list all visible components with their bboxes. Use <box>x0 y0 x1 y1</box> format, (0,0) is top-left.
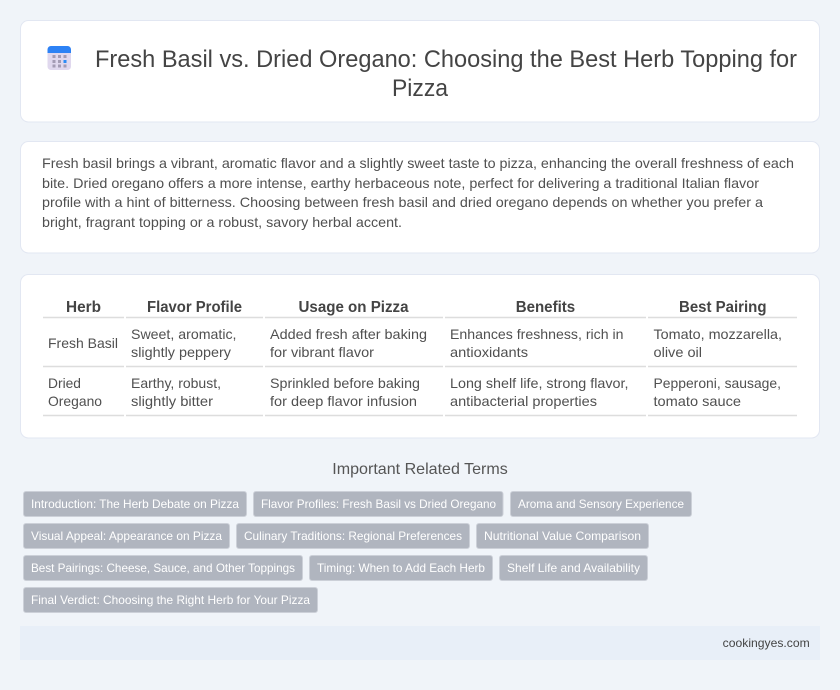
panel: comparison table <box>20 274 820 438</box>
tag: Culinary Traditions: Regional Preferences <box>244 529 462 543</box>
tag: Introduction: The Herb Debate on Pizza <box>31 497 239 511</box>
tag: Final Verdict: Choosing the Right Herb for Your Pizza <box>31 593 310 607</box>
footer: cookingyes.com <box>723 636 810 650</box>
tag <box>236 524 470 548</box>
table header: Benefits <box>516 299 575 316</box>
intro paragraph <box>42 155 794 230</box>
table row: dried oregano: tomato sauce <box>654 393 741 409</box>
title text <box>95 46 797 102</box>
tag: Visual Appeal: Appearance on Pizza <box>31 529 222 543</box>
table row: fresh basil: Added fresh after baking <box>270 326 427 342</box>
table row: dried oregano <box>43 375 797 416</box>
table row: dried oregano: for deep flavor infusion <box>270 393 417 409</box>
table row: fresh basil: Fresh Basil <box>48 335 118 351</box>
title text: Fresh Basil vs. Dried Oregano: Choosing the Best Herb Topping for <box>95 46 797 73</box>
table row: dried oregano: Oregano <box>48 393 102 409</box>
panel: title <box>20 20 820 122</box>
tag <box>24 492 246 516</box>
heading: important related terms: Important Related Terms <box>332 461 508 478</box>
intro paragraph: Fresh basil brings a vibrant, aromatic flavor and a slightly sweet taste to pizza, enhancing the overall freshness of each <box>42 155 794 171</box>
intro paragraph: bite. Dried oregano offers a more intense, earthy herbaceous note, perfect for delivering a traditional Italian flavor <box>42 175 759 191</box>
tag: Best Pairings: Cheese, Sauce, and Other Toppings <box>31 561 295 575</box>
table row: fresh basil: for vibrant flavor <box>270 344 374 360</box>
tag <box>310 556 492 580</box>
tag: Flavor Profiles: Fresh Basil vs Dried Oregano <box>261 497 496 511</box>
intro paragraph: profile with a hint of bitterness. Choosing between fresh basil and dried oregano depends on whether you prefer a <box>42 194 763 210</box>
table header: Herb <box>66 299 101 316</box>
icon: calendar <box>48 46 71 70</box>
tag <box>254 492 503 516</box>
tag <box>476 524 648 548</box>
title text: Pizza <box>392 75 449 102</box>
table row: fresh basil: Enhances freshness, rich in <box>450 326 624 342</box>
table row: dried oregano: antibacterial properties <box>450 393 597 409</box>
table header: Best Pairing <box>679 299 766 316</box>
tag: Aroma and Sensory Experience <box>518 497 684 511</box>
table row: dried oregano: slightly bitter <box>131 393 213 409</box>
tag <box>24 524 230 548</box>
table row: fresh basil: antioxidants <box>450 344 528 360</box>
tag: Timing: When to Add Each Herb <box>317 561 485 575</box>
intro paragraph: bright, fragrant topping or a robust, savory herbal accent. <box>42 214 402 230</box>
footer <box>20 626 820 660</box>
tag <box>500 556 648 580</box>
tag <box>24 556 302 580</box>
panel: introduction <box>20 142 820 253</box>
table header: Usage on Pizza <box>298 299 409 316</box>
table row: fresh basil: Sweet, aromatic, <box>131 326 236 342</box>
tag: Shelf Life and Availability <box>507 561 640 575</box>
table row: dried oregano: Pepperoni, sausage, <box>654 375 781 391</box>
table row: fresh basil: olive oil <box>654 344 702 360</box>
table row: dried oregano: Earthy, robust, <box>131 375 221 391</box>
table row: fresh basil: Tomato, mozzarella, <box>654 326 782 342</box>
table row: dried oregano: Dried <box>48 375 81 391</box>
table row: dried oregano: Long shelf life, strong flavor, <box>450 375 628 391</box>
table row: fresh basil <box>43 326 797 366</box>
table header <box>43 299 797 318</box>
table row: dried oregano: Sprinkled before baking <box>270 375 420 391</box>
tag <box>510 492 692 516</box>
tag list <box>24 492 692 612</box>
tag <box>24 588 318 612</box>
table row: fresh basil: slightly peppery <box>131 344 231 360</box>
table header: Flavor Profile <box>147 299 242 316</box>
tag: Nutritional Value Comparison <box>484 529 641 543</box>
